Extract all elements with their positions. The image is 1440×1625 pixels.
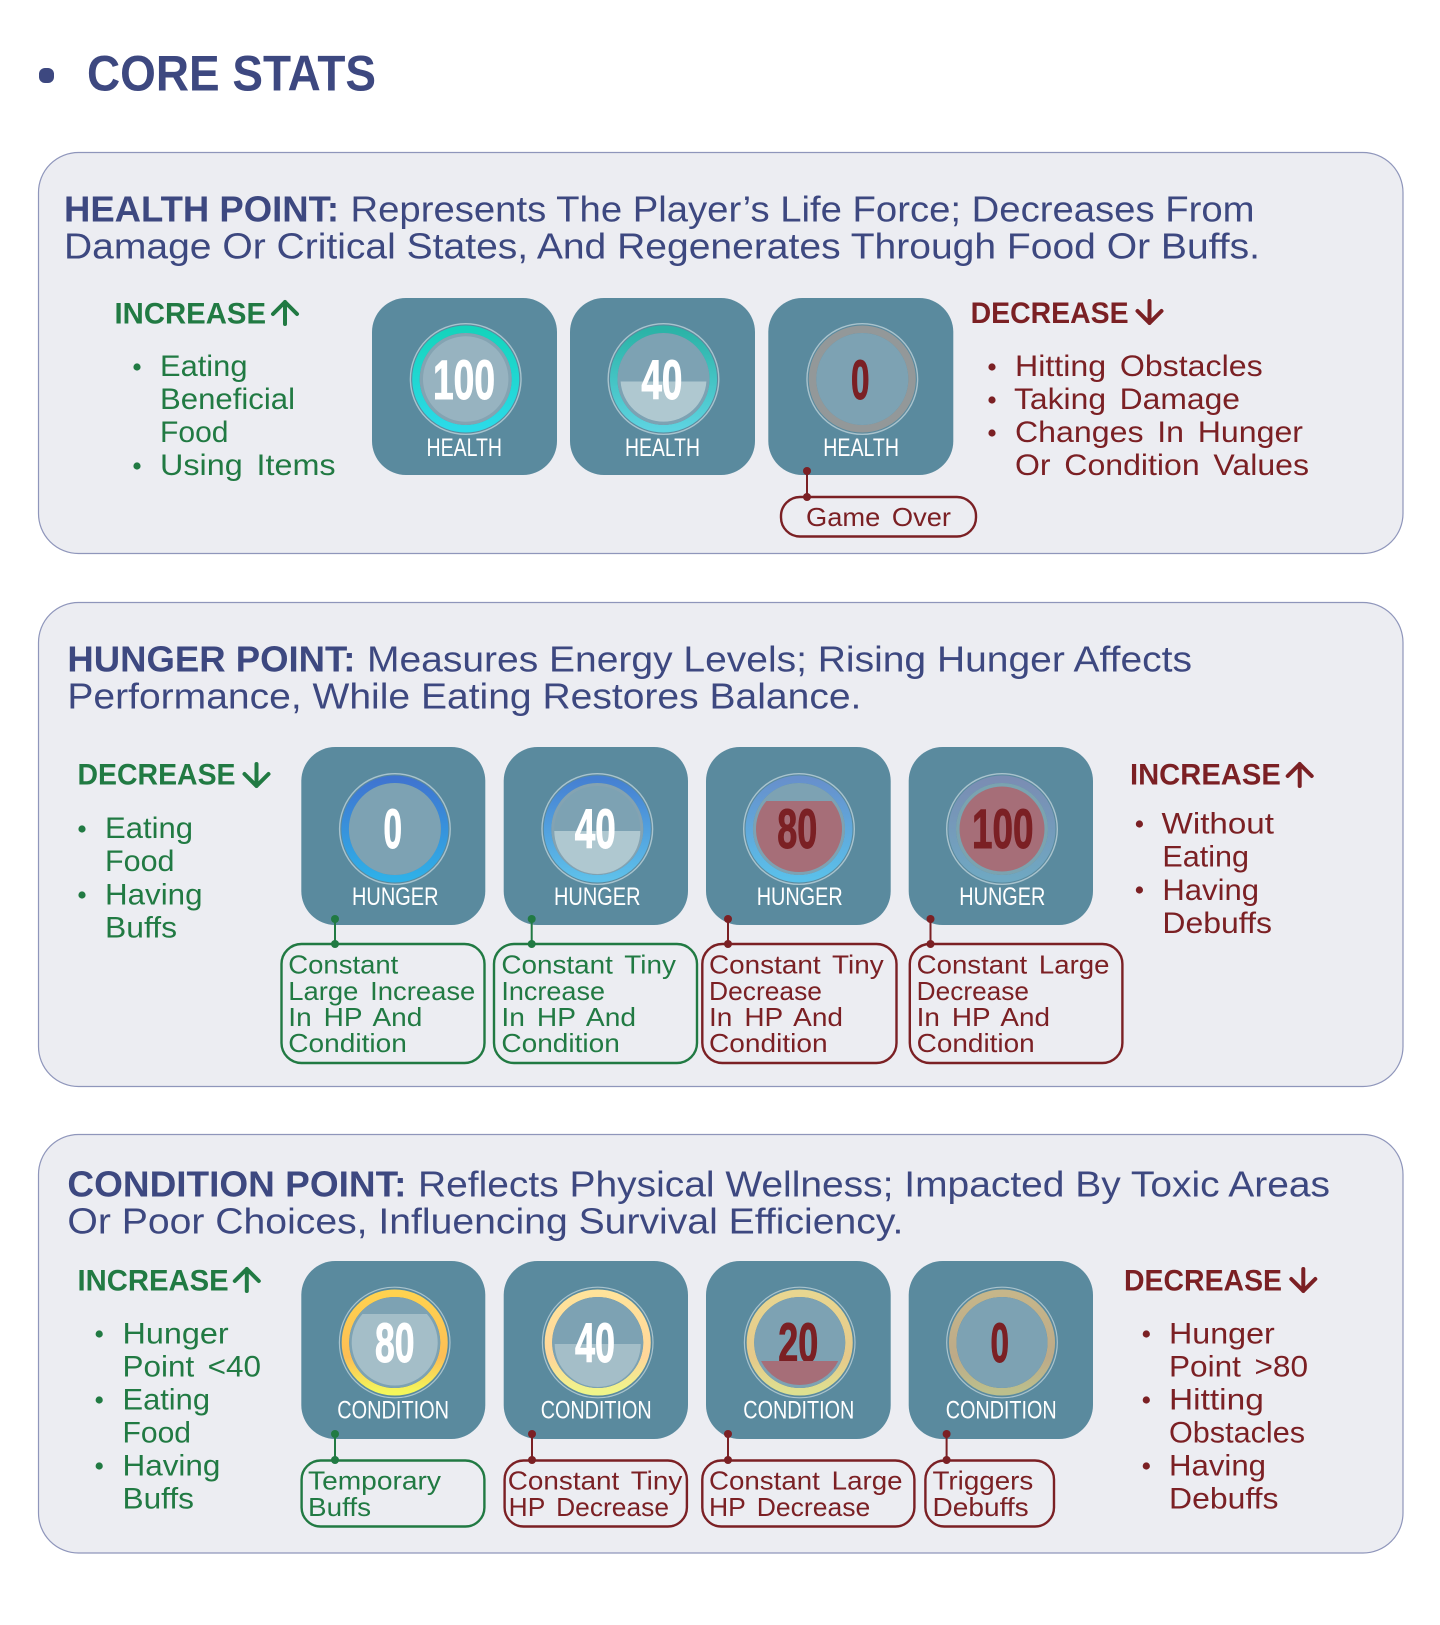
- gauge card: health 40: [570, 298, 755, 475]
- callout: constant tiny decrease: Constant Tiny: [709, 950, 884, 980]
- title: CORE STATS: [87, 46, 376, 102]
- panel: condition point: [38, 1134, 1403, 1553]
- hunger decrease list: DECREASE: [78, 758, 236, 792]
- hunger increase list: Debuffs: [1162, 907, 1272, 940]
- gauge card: condition 20: 20: [778, 1311, 818, 1374]
- gauge card: health 0: [768, 298, 953, 475]
- gauge card: health 100: [372, 298, 557, 475]
- health decrease list: Changes In Hunger: [1015, 416, 1303, 449]
- health heading: HEALTH POINT:: [64, 188, 339, 230]
- callout: constant large increase: [282, 915, 484, 1063]
- gauge card: health 40: HEALTH: [625, 434, 700, 462]
- condition heading: [67, 1164, 1330, 1242]
- gauge card: hunger 80: 80: [777, 797, 817, 860]
- callout: constant tiny decrease: [702, 915, 896, 1063]
- health heading: Represents The Player’s Life Force; Decreases From: [350, 188, 1254, 230]
- callout: triggers debuffs: Debuffs: [932, 1492, 1029, 1522]
- callout: constant large hp decrease: HP Decrease: [709, 1492, 870, 1522]
- condition increase list: Point <40: [122, 1351, 261, 1384]
- gauge card: hunger 100: HUNGER: [959, 883, 1045, 911]
- hunger decrease list: Food: [105, 845, 174, 878]
- callout: constant tiny decrease: Decrease: [709, 976, 822, 1006]
- gauge card: condition 0: 0: [990, 1311, 1009, 1374]
- gauge card: condition 0: CONDITION: [946, 1396, 1057, 1424]
- callout: temporary buffs: Buffs: [308, 1492, 371, 1522]
- health decrease list: Taking Damage: [1014, 383, 1240, 416]
- gauge card: health 0: 0: [851, 348, 870, 411]
- hunger panel background: [38, 602, 1403, 1086]
- gauge card: condition 20: CONDITION: [743, 1396, 854, 1424]
- hunger increase list: INCREASE: [1130, 758, 1281, 792]
- callout: constant tiny decrease: Condition: [709, 1028, 828, 1058]
- gauge card: health 100: HEALTH: [426, 434, 502, 462]
- hunger decrease list: Eating: [105, 812, 193, 845]
- condition increase list: Food: [122, 1417, 191, 1450]
- gauge card: condition 80: CONDITION: [337, 1396, 449, 1424]
- hunger increase list: Eating: [1162, 840, 1249, 874]
- callout: triggers debuffs: Triggers: [932, 1466, 1033, 1496]
- gauge card: condition 0: [909, 1261, 1093, 1439]
- health heading: [64, 188, 1260, 266]
- callout: constant tiny increase: Increase: [501, 976, 605, 1006]
- callout: constant large increase: Constant: [288, 950, 399, 980]
- condition decrease list: Having: [1169, 1450, 1266, 1483]
- callout: constant tiny increase: Condition: [501, 1028, 620, 1058]
- gauge card: health 100: 100: [433, 348, 495, 411]
- condition increase list: Hunger: [122, 1318, 229, 1351]
- panel: hunger point: [38, 602, 1403, 1086]
- callout: constant large decrease: Condition: [917, 1028, 1035, 1058]
- callout: constant large decrease: Constant Large: [917, 950, 1110, 980]
- callout: constant tiny decrease: In HP And: [709, 1002, 843, 1032]
- gauge card: health 0: HEALTH: [823, 434, 899, 462]
- condition decrease list: Debuffs: [1169, 1483, 1278, 1516]
- gauge card: condition 80: 80: [375, 1311, 414, 1374]
- health decrease list: Or Condition Values: [1015, 449, 1309, 482]
- callout: game over: [781, 467, 976, 536]
- callout: constant large decrease: Decrease: [917, 976, 1029, 1006]
- health heading: Damage Or Critical States, And Regenerates Through Food Or Buffs.: [64, 226, 1260, 266]
- condition decrease list: Hunger: [1169, 1318, 1275, 1351]
- condition decrease list: Hitting: [1169, 1384, 1264, 1417]
- gauge card: hunger 80: HUNGER: [757, 883, 843, 911]
- condition heading: Or Poor Choices, Influencing Survival Efficiency.: [67, 1200, 903, 1242]
- health increase list: INCREASE: [114, 298, 266, 330]
- callout: constant tiny hp decrease: HP Decrease: [509, 1492, 669, 1522]
- callout: constant tiny increase: Constant Tiny: [501, 950, 676, 980]
- gauge card: hunger 0: [301, 747, 485, 925]
- hunger increase list: [1130, 758, 1312, 940]
- gauge card: hunger 0: 0: [384, 797, 402, 860]
- health decrease list: [971, 297, 1309, 482]
- callout: constant tiny increase: In HP And: [501, 1002, 636, 1032]
- gauge card: condition 20: [706, 1261, 891, 1439]
- callout: constant large decrease: [910, 915, 1122, 1063]
- callout: game over: Game Over: [806, 502, 951, 532]
- hunger heading: Performance, While Eating Restores Balance.: [67, 676, 861, 716]
- condition decrease list: DECREASE: [1124, 1265, 1282, 1298]
- condition increase list: Buffs: [122, 1483, 194, 1516]
- callout: constant tiny increase: [494, 915, 697, 1063]
- condition heading: Reflects Physical Wellness; Impacted By Toxic Areas: [418, 1164, 1330, 1204]
- hunger increase list: Having: [1162, 874, 1259, 907]
- condition decrease list: [1124, 1265, 1315, 1516]
- callout: temporary buffs: Temporary: [308, 1466, 441, 1496]
- hunger increase list: Without: [1162, 808, 1275, 840]
- condition panel background: [38, 1134, 1403, 1553]
- gauge card: hunger 100: 100: [972, 797, 1034, 860]
- callout: constant large decrease: In HP And: [917, 1002, 1050, 1032]
- callout: constant large increase: In HP And: [288, 1002, 422, 1032]
- gauge card: condition 40: [504, 1261, 688, 1439]
- gauge card: hunger 40: 40: [575, 797, 616, 860]
- gauge card: hunger 40: [504, 747, 688, 925]
- health increase list: Food: [160, 416, 228, 449]
- red level fill: [761, 1361, 838, 1385]
- health decrease list: Hitting Obstacles: [1015, 350, 1263, 383]
- condition increase list: Eating: [122, 1384, 210, 1417]
- gauge card: hunger 80: [706, 747, 891, 925]
- callout: triggers debuffs: [925, 1430, 1054, 1526]
- callout: constant large increase: Condition: [288, 1028, 407, 1058]
- gauge card: condition 80: [301, 1261, 485, 1439]
- hunger decrease list: [78, 758, 268, 944]
- condition increase list: [78, 1265, 261, 1516]
- gauge card: condition 40: CONDITION: [541, 1396, 652, 1424]
- panel: health point: [38, 152, 1403, 554]
- callout: constant tiny hp decrease: [505, 1430, 687, 1526]
- health increase list: Eating: [160, 350, 248, 383]
- health increase list: Beneficial: [160, 383, 295, 416]
- gauge card: hunger 100: [909, 747, 1093, 925]
- gauge card: health 40: 40: [641, 348, 682, 411]
- health increase list: [114, 298, 336, 482]
- hunger heading: Measures Energy Levels; Rising Hunger Affects: [367, 638, 1192, 680]
- condition decrease list: Point >80: [1169, 1351, 1308, 1384]
- callout: constant large hp decrease: Constant Large: [709, 1466, 902, 1496]
- callout: constant large increase: Large Increase: [288, 976, 475, 1006]
- hunger decrease list: Buffs: [105, 912, 177, 944]
- hunger heading: HUNGER POINT:: [67, 638, 355, 680]
- gauge card: hunger 0: HUNGER: [352, 883, 438, 911]
- health decrease list: DECREASE: [971, 297, 1129, 330]
- callout: constant tiny hp decrease: Constant Tiny: [508, 1466, 682, 1496]
- gauge card: condition 40: 40: [575, 1311, 615, 1374]
- condition increase list: Having: [122, 1450, 220, 1483]
- hunger heading: [67, 638, 1192, 716]
- callout: constant large hp decrease: [702, 1430, 914, 1526]
- condition heading: CONDITION POINT:: [67, 1164, 406, 1204]
- condition decrease list: Obstacles: [1169, 1417, 1305, 1450]
- health panel background: [38, 152, 1403, 554]
- health increase list: Using Items: [160, 449, 336, 482]
- callout: temporary buffs: [302, 1430, 484, 1526]
- hunger decrease list: Having: [105, 878, 202, 912]
- gauge card: hunger 40: HUNGER: [554, 883, 640, 911]
- condition increase list: INCREASE: [78, 1265, 229, 1298]
